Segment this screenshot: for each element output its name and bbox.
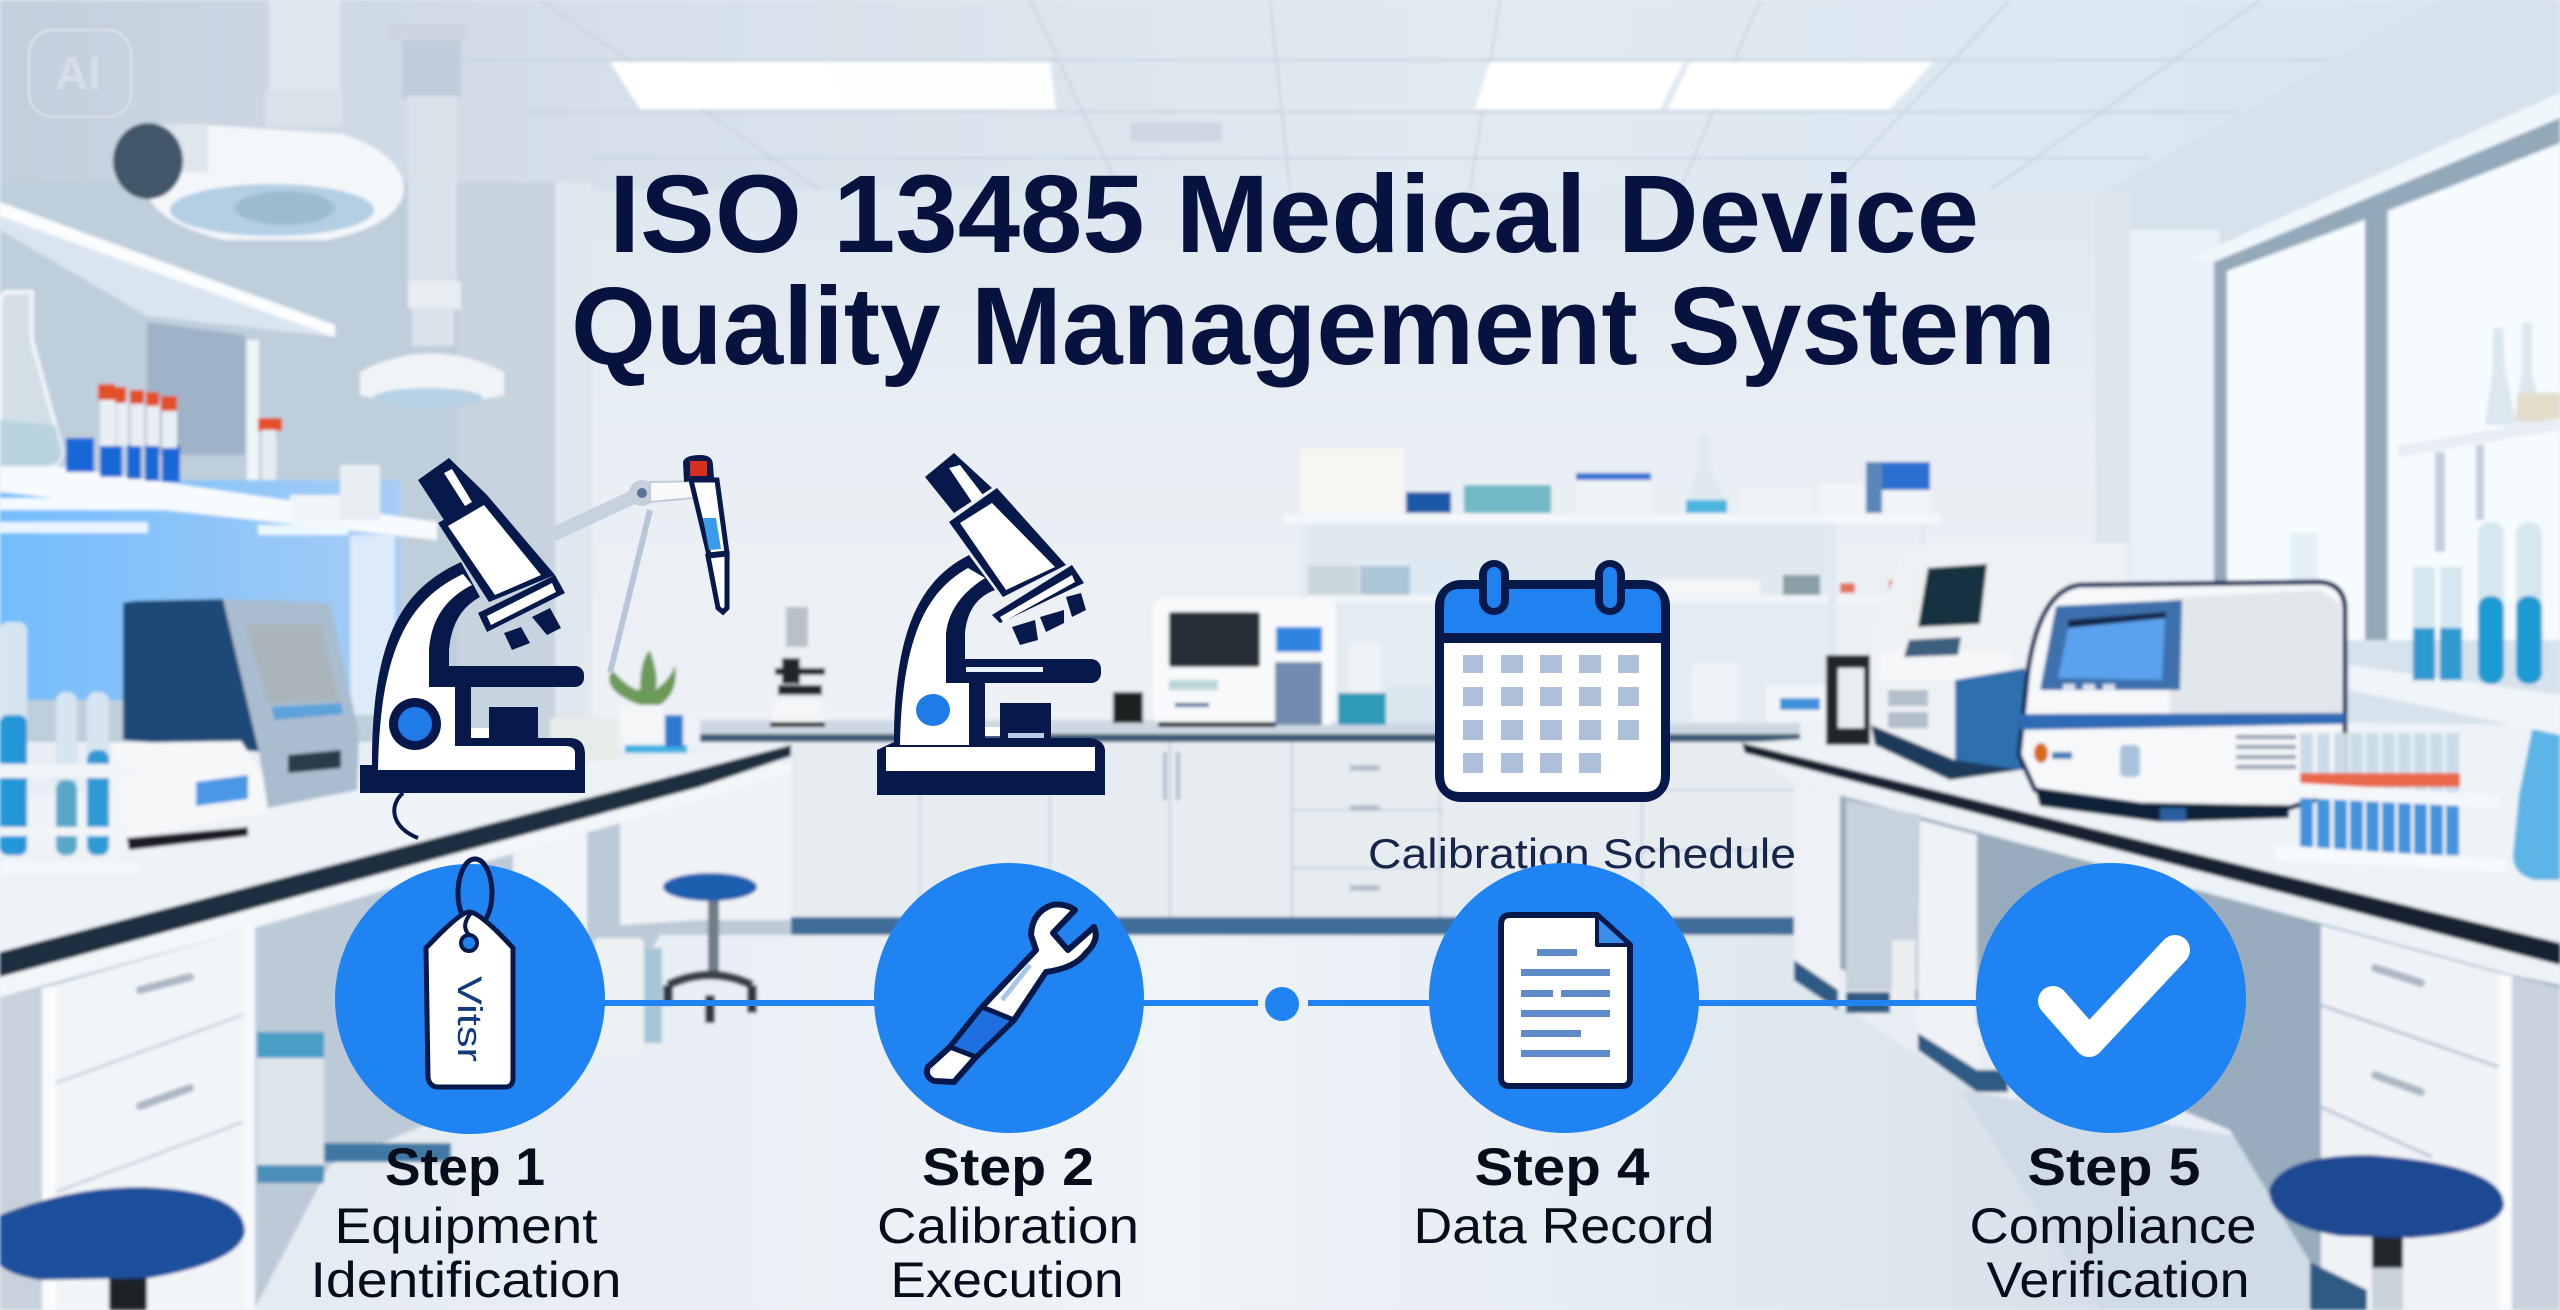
right floor shadow [1960, 1090, 2400, 1310]
foreground stool left [0, 1187, 245, 1310]
flask at right edge [2513, 715, 2560, 880]
step 1 label: Step 1 [385, 1138, 545, 1197]
watermark: AI badge: AI [55, 47, 101, 99]
back wall [592, 190, 2102, 750]
title: Quality Management System [571, 265, 2056, 388]
ceiling lamp one [113, 0, 404, 240]
step 4 label: Data Record [1414, 1198, 1714, 1254]
icon: microscope one [360, 458, 585, 838]
icon: pipette on arm [552, 455, 727, 673]
glassware on the shelf [0, 292, 380, 523]
right upper shelf with flasks [2396, 322, 2560, 552]
step 4 label [1414, 1138, 1714, 1254]
back stool [663, 873, 757, 1023]
step 1: tag circle [335, 859, 605, 1134]
back shelves [1113, 435, 1941, 725]
plant and sample tray [550, 650, 687, 760]
icon: microscope two [877, 453, 1105, 795]
title: ISO 13485 Medical Device [609, 153, 1979, 276]
step 2 label: Step 2 [922, 1138, 1094, 1197]
title [571, 153, 2056, 388]
right tall tubes and shelf [2349, 522, 2560, 735]
step 5 label [1970, 1138, 2256, 1308]
step 5 label: Compliance [1970, 1198, 2256, 1254]
step 1 label [310, 1138, 622, 1308]
left counter and cabinets [0, 745, 791, 1310]
step 1 label: Identification [310, 1252, 622, 1308]
step 5 label: Verification [1986, 1252, 2250, 1308]
icon: calibration calendar [1435, 560, 1670, 802]
step 2: wrench circle [874, 863, 1144, 1133]
left back wall [0, 182, 460, 742]
ceiling [0, 0, 2440, 196]
step 1: tag circle: Vitsr [450, 976, 488, 1062]
right counter and cabinets [1742, 743, 2560, 1310]
back white analyser [1153, 598, 1336, 727]
counter surface left [0, 745, 791, 952]
step 1 label: Equipment [334, 1198, 598, 1254]
step 5: check circle [1976, 863, 2246, 1133]
left rack of test tubes [0, 622, 140, 874]
left wall units and shelves [0, 202, 437, 715]
step 4 label: Step 4 [1474, 1138, 1650, 1197]
step 2 label: Execution [890, 1252, 1124, 1308]
back right instrument [1826, 543, 2128, 780]
step 2 label [877, 1138, 1139, 1308]
watermark: AI badge [29, 30, 131, 117]
floor [254, 935, 2320, 1310]
counter surface right [1742, 720, 2560, 945]
background microscope [770, 607, 826, 727]
rack of blue test tubes [2276, 733, 2506, 872]
calendar caption: Calibration Schedule [1368, 830, 1796, 877]
step 4: document circle [1429, 863, 1699, 1133]
ceiling lamp two [360, 24, 504, 408]
left instrument [112, 599, 359, 850]
back cabinets [700, 720, 1804, 935]
foreground stool right [2269, 1155, 2504, 1310]
right wall and window [2096, 0, 2560, 760]
step 2 label: Calibration [877, 1198, 1139, 1254]
process connector line [600, 987, 1980, 1021]
step 5 label: Step 5 [2028, 1138, 2200, 1197]
front right instrument [2019, 582, 2345, 822]
